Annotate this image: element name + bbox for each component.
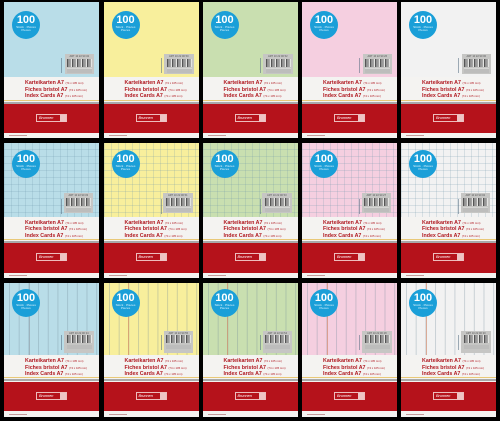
card: pink squared: Pieces: [319, 167, 329, 171]
card: white blank: Index Cards A7 (74 x 105 mm): [422, 93, 480, 99]
card: green squared: Stück · Pièces: [215, 164, 234, 168]
card: yellow lined: Stück · Pièces: [116, 302, 135, 306]
card: blue blank: 100: [17, 14, 35, 26]
card: green lined: Index Cards A7 (74 x 105 mm): [224, 371, 281, 377]
card: yellow squared: Pieces: [121, 167, 130, 171]
card: yellow squared: Brunnen: [138, 255, 153, 259]
card: white squared: Stück · Pièces: [413, 164, 433, 168]
card: green lined: [202, 283, 298, 417]
card: pink blank: Stück · Pièces: [314, 24, 334, 28]
card: yellow lined: [104, 283, 198, 417]
card: blue squared: Index Cards A7 (74 x 105 mm): [25, 232, 83, 238]
card: yellow blank: Fiches bristol A7 (74 x 105 mm): [124, 86, 186, 92]
card: pink squared: 100: [315, 152, 333, 164]
card: green blank: ART 10 22 90 52: [268, 55, 288, 58]
card: white lined: Karteikarten A7 (74 x 105 mm): [422, 358, 480, 364]
card: blue squared: ART 10 22 90 33: [68, 194, 88, 197]
card: yellow blank: Brunnen: [138, 116, 153, 120]
card: blue blank: Fiches bristol A7 (74 x 105 mm): [25, 86, 87, 92]
card: green lined: ART 10 22 90 54: [268, 332, 287, 335]
card: white blank: [401, 2, 496, 138]
card: blue lined: Karteikarten A7 (74 x 105 mm): [25, 358, 83, 364]
card: green blank: Fiches bristol A7 (74 x 105 mm): [224, 86, 286, 92]
card: green lined: Karteikarten A7 (74 x 105 mm): [224, 358, 282, 364]
card: pink blank: Karteikarten A7 (74 x 105 mm): [323, 80, 381, 86]
card: green squared: Karteikarten A7 (74 x 105 mm): [224, 220, 282, 226]
card: green lined: Stück · Pièces: [215, 302, 234, 306]
card: yellow lined: Fiches bristol A7 (74 x 105 mm): [124, 365, 186, 371]
card: blue squared: Fiches bristol A7 (74 x 105 mm): [25, 226, 87, 232]
card: white lined: Brunnen: [436, 394, 450, 398]
card: yellow blank: ART 10 22 90 50: [169, 55, 189, 58]
card: green blank: Brunnen: [238, 116, 252, 120]
card: green lined: Brunnen: [238, 394, 252, 398]
card: pink lined: 100: [315, 292, 333, 304]
card: white blank: ART 10 22 90 00: [466, 55, 486, 58]
card: pink squared: Index Cards A7 (74 x 105 mm): [323, 232, 381, 238]
card: green blank: [202, 2, 298, 138]
card: yellow squared: Karteikarten A7 (74 x 105 mm): [124, 220, 183, 226]
card: blue squared: Brunnen: [39, 255, 53, 259]
card: green squared: ART 10 22 90 53: [267, 194, 287, 197]
card: blue blank: [4, 2, 99, 138]
card: blue lined: ART 10 22 90 34: [69, 332, 89, 335]
card: white blank: Brunnen: [436, 116, 450, 120]
card: yellow blank: Karteikarten A7 (74 x 105 mm): [124, 80, 183, 86]
card: pink lined: Pieces: [319, 306, 329, 310]
card: green squared: 100: [215, 152, 234, 164]
card: yellow blank: Index Cards A7 (74 x 105 mm): [124, 93, 182, 99]
card: blue blank: ART 10 22 90 32: [70, 55, 89, 58]
card: green squared: Pieces: [220, 167, 229, 171]
card: pink lined: Index Cards A7 (74 x 105 mm): [323, 371, 381, 377]
card: pink lined: Brunnen: [337, 394, 351, 398]
card: pink squared: Brunnen: [337, 255, 351, 259]
card: pink blank: Pieces: [319, 28, 329, 32]
card: white blank: 100: [414, 14, 432, 26]
card: yellow lined: Karteikarten A7 (74 x 105 mm): [124, 358, 183, 364]
card: white blank: Karteikarten A7 (74 x 105 mm): [422, 80, 480, 86]
card: yellow blank: [104, 2, 198, 138]
card: pink lined: Karteikarten A7 (74 x 105 mm): [323, 358, 381, 364]
card: yellow squared: Fiches bristol A7 (74 x 105 mm): [124, 226, 186, 232]
card: pink lined: Fiches bristol A7 (74 x 105 mm): [323, 365, 385, 371]
card: white squared: ART 10 22 90 02: [466, 194, 485, 197]
card: white blank: Fiches bristol A7 (74 x 105 mm): [422, 86, 484, 92]
card: green lined: Fiches bristol A7 (74 x 105 mm): [224, 365, 286, 371]
card: white squared: 100: [414, 152, 432, 164]
card: green blank: Karteikarten A7 (74 x 105 mm): [224, 80, 282, 86]
card: blue blank: Pieces: [21, 28, 31, 32]
card: white blank: Pieces: [418, 28, 428, 32]
card: green squared: Brunnen: [238, 255, 252, 259]
card: pink squared: [302, 143, 397, 278]
card: blue lined: Pieces: [21, 306, 31, 310]
card: pink squared: Fiches bristol A7 (74 x 105 mm): [323, 226, 385, 232]
card: white lined: 100: [414, 292, 432, 304]
card: yellow blank: Pieces: [121, 28, 130, 32]
card: green blank: 100: [215, 14, 234, 26]
card: pink squared: Stück · Pièces: [314, 164, 334, 168]
card: green blank: Index Cards A7 (74 x 105 mm): [224, 93, 281, 99]
card: yellow squared: 100: [116, 152, 135, 164]
card: white lined: Fiches bristol A7 (74 x 105 mm): [422, 365, 484, 371]
card: yellow blank: 100: [116, 14, 135, 26]
card: white blank: Stück · Pièces: [413, 24, 433, 28]
card: green squared: Fiches bristol A7 (74 x 105 mm): [224, 226, 286, 232]
card: pink blank: Brunnen: [337, 116, 351, 120]
card: green lined: Pieces: [220, 306, 229, 310]
card: blue squared: Stück · Pièces: [16, 164, 36, 168]
card: yellow lined: Pieces: [121, 306, 130, 310]
card: yellow squared: ART 10 22 90 51: [168, 194, 188, 197]
card: white squared: Pieces: [418, 167, 428, 171]
card: pink blank: Index Cards A7 (74 x 105 mm): [323, 93, 381, 99]
card: yellow squared: Stück · Pièces: [116, 164, 135, 168]
card: pink squared: Karteikarten A7 (74 x 105 mm): [323, 220, 381, 226]
card: yellow lined: Index Cards A7 (74 x 105 mm): [124, 371, 182, 377]
card: white lined: Pieces: [418, 306, 428, 310]
card: white squared: Fiches bristol A7 (74 x 105 mm): [422, 226, 484, 232]
card: blue lined: Index Cards A7 (74 x 105 mm): [25, 371, 83, 377]
card: blue lined: Stück · Pièces: [16, 302, 36, 306]
card: white squared: [401, 143, 496, 278]
card: pink blank: ART 10 22 90 26: [368, 55, 387, 58]
card: blue blank: Karteikarten A7 (74 x 105 mm): [25, 80, 83, 86]
card: yellow squared: Index Cards A7 (74 x 105 mm): [124, 232, 182, 238]
card: blue blank: Stück · Pièces: [16, 24, 36, 28]
card: yellow lined: 100: [116, 292, 135, 304]
card: white squared: Index Cards A7 (74 x 105 mm): [422, 232, 480, 238]
card: yellow lined: ART 10 22 90 55: [168, 332, 188, 335]
card: blue squared: [4, 143, 99, 278]
card: blue blank: Brunnen: [39, 116, 53, 120]
card: yellow blank: Stück · Pièces: [116, 24, 135, 28]
card: white squared: Karteikarten A7 (74 x 105 mm): [422, 220, 480, 226]
card: pink blank: Fiches bristol A7 (74 x 105 mm): [323, 86, 385, 92]
card: yellow squared: [104, 143, 198, 278]
card: pink squared: ART 10 22 90 27: [366, 194, 386, 197]
card: yellow lined: Brunnen: [138, 394, 153, 398]
card: white lined: Stück · Pièces: [413, 302, 433, 306]
card: blue squared: 100: [17, 152, 35, 164]
card: pink lined: [302, 283, 397, 417]
card: blue lined: Fiches bristol A7 (74 x 105 mm): [25, 365, 87, 371]
card: green squared: Index Cards A7 (74 x 105 mm): [224, 232, 281, 238]
card: pink lined: ART 10 22 90 28: [367, 332, 387, 335]
card: blue lined: Brunnen: [39, 394, 53, 398]
card: blue lined: [4, 283, 99, 417]
card: green squared: [202, 143, 298, 278]
card: white lined: [401, 283, 496, 417]
card: pink blank: [302, 2, 397, 138]
card: blue squared: Pieces: [21, 167, 31, 171]
card: white lined: Index Cards A7 (74 x 105 mm): [422, 371, 480, 377]
card: green blank: Stück · Pièces: [215, 24, 234, 28]
card: blue squared: Karteikarten A7 (74 x 105 mm): [25, 220, 83, 226]
card: blue lined: 100: [17, 292, 35, 304]
card: pink blank: 100: [315, 14, 333, 26]
card: pink lined: Stück · Pièces: [314, 302, 334, 306]
card: green blank: Pieces: [220, 28, 229, 32]
card: green lined: 100: [215, 292, 234, 304]
card: blue blank: Index Cards A7 (74 x 105 mm): [25, 93, 83, 99]
card: white lined: ART 10 22 90 30: [466, 332, 486, 335]
card: white squared: Brunnen: [436, 255, 450, 259]
